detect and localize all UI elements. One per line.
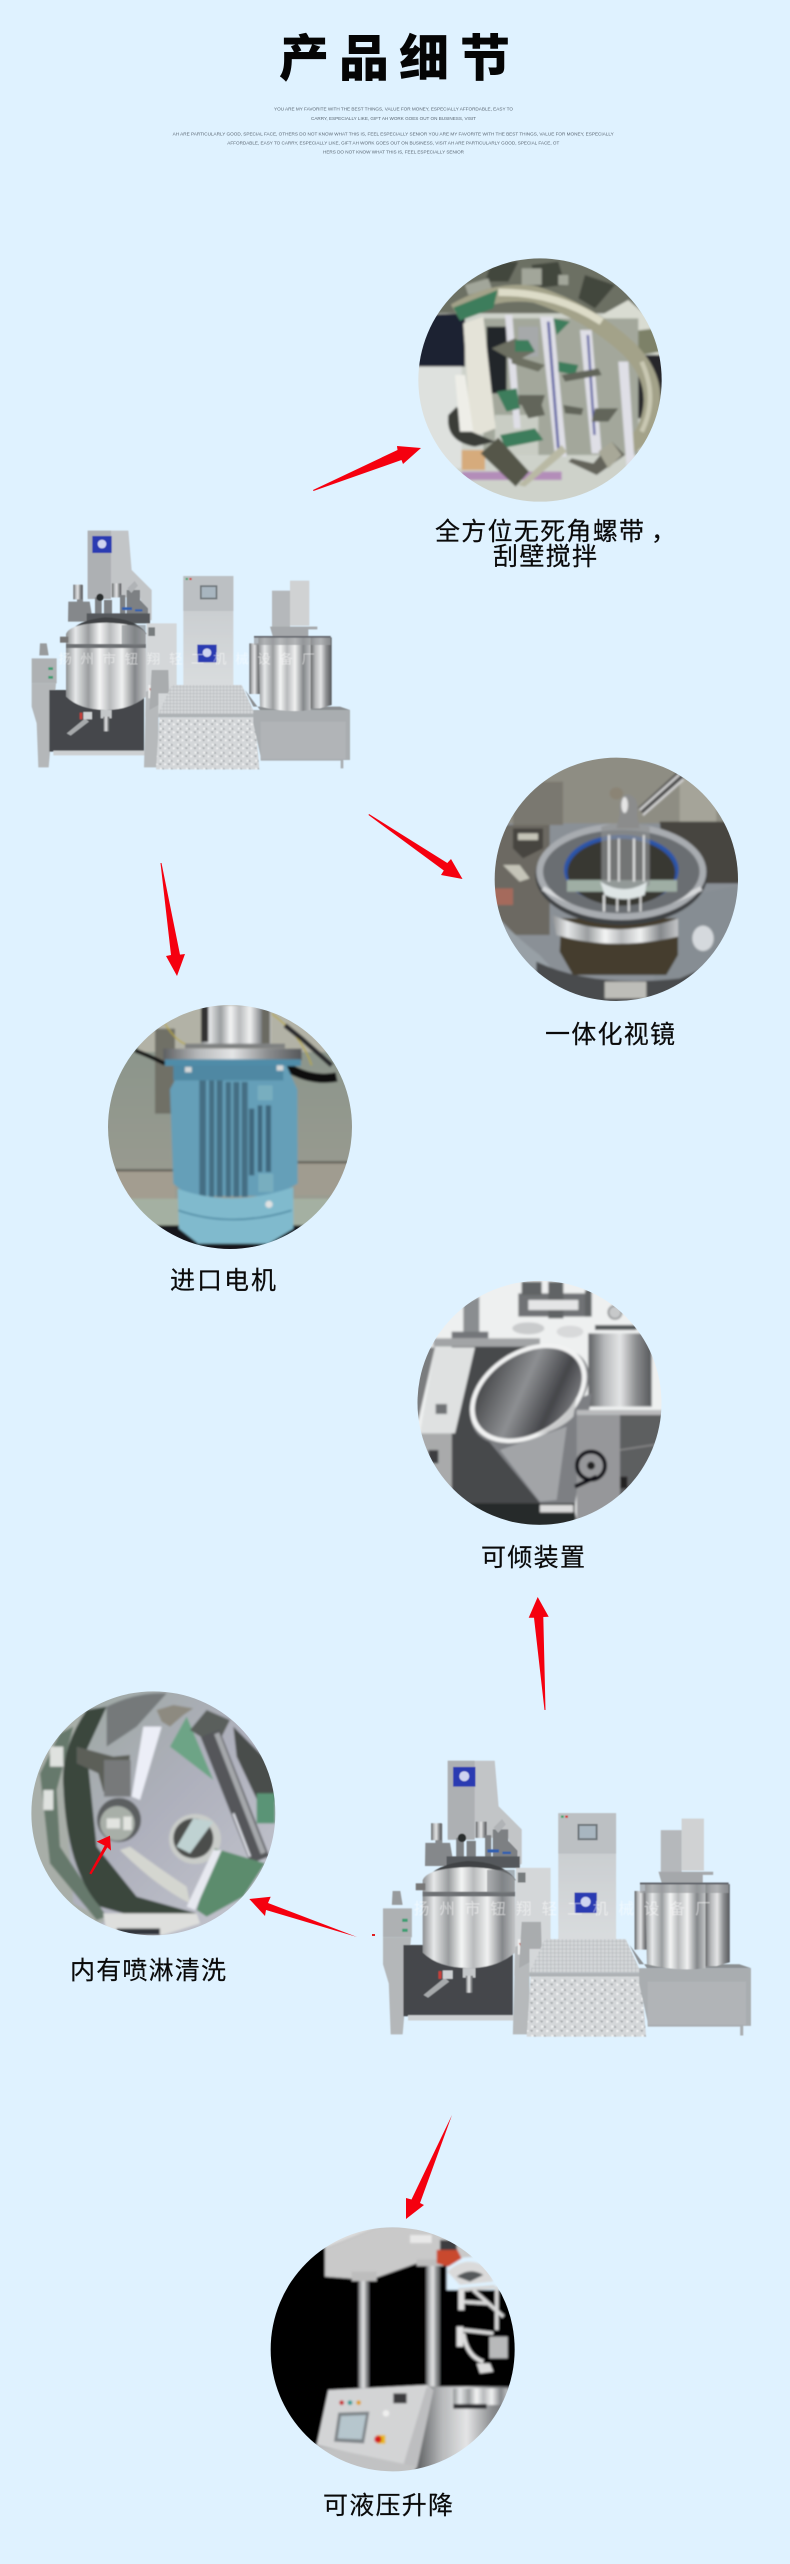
intro text block: HERS DO NOT KNOW WHAT THIS IS, FEEL ESPECIALLY SENIOR: [323, 149, 465, 154]
label: agitator: ，: [651, 518, 676, 546]
photo: imported motor: [105, 1002, 355, 1252]
arrow: to tilting device: [529, 1597, 549, 1710]
arrow: to agitator: [313, 446, 421, 491]
label: sight glass: 一体化视镜: [545, 1021, 675, 1049]
arrow: to spray nozzle: [249, 1897, 357, 1937]
photo: tilting bowl: [418, 1280, 662, 1525]
intro text block: AH ARE PARTICULARLY GOOD, SPECIAL FACE, OTHERS DO NOT KNOW WHAT THIS IS, FEEL ESPECIALLY SENIOR YOU ARE MY FAVORITE WITH THE BEST THINGS, VALUE FOR MONEY, ESPECIALLY: [173, 131, 614, 136]
arrow: to hydraulic lift: [406, 2115, 452, 2219]
photo: spray cleaning nozzle: [30, 1690, 280, 1940]
icon: small red arrow on nozzle: [89, 1836, 111, 1874]
label: agitator: 刮壁搅拌: [493, 543, 597, 571]
label: agitator: [435, 518, 676, 571]
intro text block: CARRY, ESPECIALLY LIKE, GIFT AH WORK GOES OUT ON BUSINESS, VISIT: [311, 116, 476, 121]
intro text block: AFFORDABLE, EASY TO CARRY, ESPECIALLY LIKE, GIFT AH WORK GOES OUT ON BUSINESS, VISIT AH ARE PARTICULARLY GOOD, SPECIAL FACE, OT: [227, 140, 559, 145]
label: tilting device: 可倾装置: [481, 1544, 585, 1572]
label: agitator: 全方位无死角螺带: [435, 518, 644, 546]
arrow: to motor: [160, 863, 185, 976]
machine: vacuum homogenizer top: 扬州市钮翔轻工机械设备厂: [58, 650, 315, 666]
intro text block: YOU ARE MY FAVORITE WITH THE BEST THINGS, VALUE FOR MONEY, ESPECIALLY AFFORDABLE, EASY TO: [274, 106, 513, 111]
machine: vacuum homogenizer bottom: 扬州市钮翔轻工机械设备厂: [414, 1900, 710, 1918]
title: 产品细节: [279, 31, 510, 87]
label: hydraulic lift: 可液压升降: [323, 2492, 453, 2520]
intro text block: [173, 106, 614, 154]
arrow: to sight glass: [368, 814, 462, 879]
photo: integrated sight glass: [493, 755, 743, 1005]
photo: spiral scraper agitator: [415, 255, 665, 505]
machine: vacuum homogenizer top: [32, 531, 350, 769]
machine: vacuum homogenizer bottom: [383, 1761, 751, 2037]
photo: hydraulic lift: [270, 2227, 515, 2472]
mark: small red dot: [372, 1934, 375, 1936]
label: spray cleaning: 内有喷淋清洗: [70, 1957, 226, 1985]
label: motor: 进口电机: [170, 1267, 276, 1295]
